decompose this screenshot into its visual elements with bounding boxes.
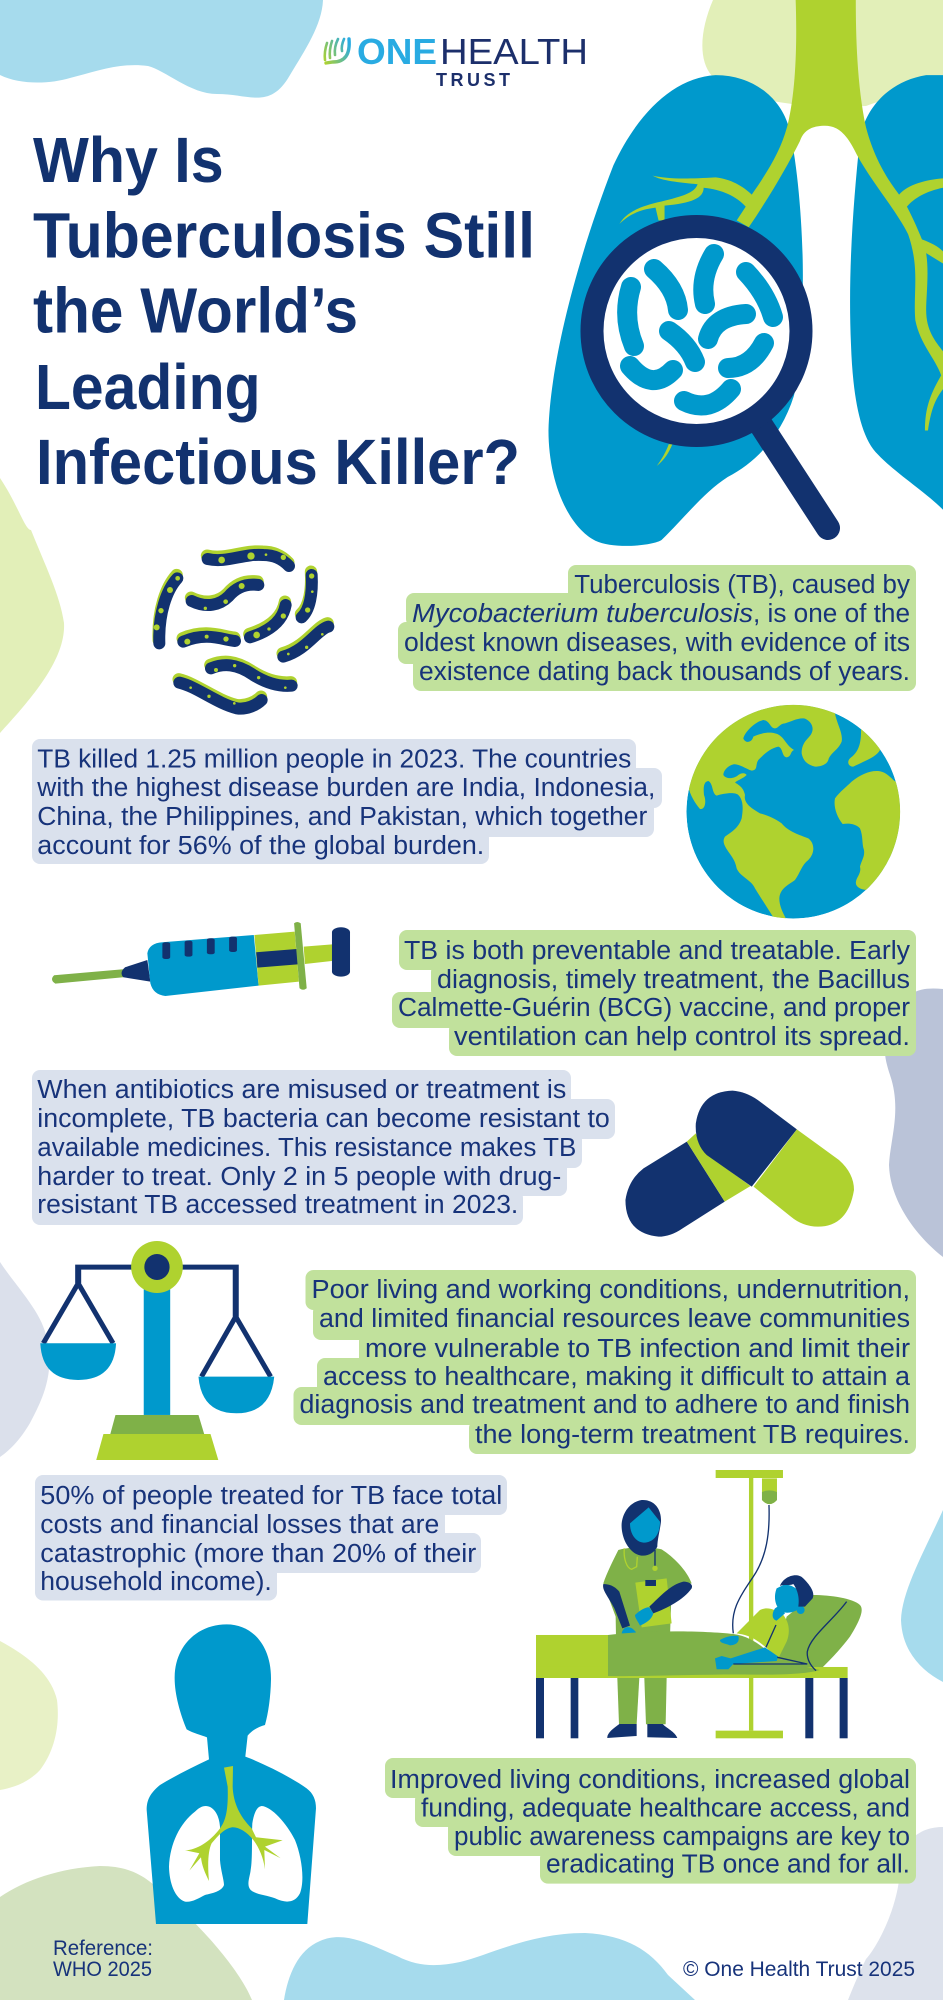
text block bbox=[390, 1766, 910, 1878]
magnifying glass handle bbox=[761, 425, 828, 528]
text block: funding, adequate healthcare access, and bbox=[421, 1794, 910, 1822]
text block: Improved living conditions, increased global bbox=[390, 1766, 910, 1794]
reference note: Reference: bbox=[53, 1937, 153, 1960]
copyright: © One Health Trust 2025 bbox=[683, 1958, 915, 1981]
logo bbox=[325, 31, 588, 90]
panel: drug resistance bbox=[32, 1070, 615, 1225]
text block: Mycobacterium tuberculosis bbox=[412, 600, 753, 628]
nurse bbox=[603, 1500, 692, 1738]
highlight background bbox=[32, 1070, 615, 1225]
background blob: left pale slate bbox=[0, 1262, 49, 1457]
text block: and limited financial resources leave communities bbox=[319, 1305, 910, 1333]
lungs bbox=[169, 1806, 302, 1902]
text block bbox=[398, 937, 911, 1051]
IV stand bbox=[716, 1470, 783, 1738]
title: Why Is bbox=[33, 124, 224, 196]
highlight background bbox=[398, 565, 916, 691]
bronchi bbox=[619, 0, 943, 466]
icon: syringe bbox=[52, 922, 350, 996]
text block: TB is both preventable and treatable. Early bbox=[404, 937, 910, 965]
text block: 50% of people treated for TB face total bbox=[40, 1482, 502, 1510]
highlight background bbox=[35, 1475, 507, 1600]
background blob: bottom left sage bbox=[0, 1866, 252, 2000]
panel: financial burden bbox=[35, 1475, 507, 1600]
text block: eradicating TB once and for all. bbox=[546, 1850, 910, 1878]
text block: with the highest disease burden are India, Indonesia, bbox=[36, 774, 655, 802]
text block: harder to treat. Only 2 in 5 people with drug- bbox=[37, 1163, 561, 1191]
title: Infectious Killer? bbox=[36, 426, 520, 498]
highlight background bbox=[32, 739, 662, 864]
bed bbox=[536, 1595, 862, 1738]
text block bbox=[40, 1482, 502, 1596]
text block: access to healthcare, making it difficult to attain a bbox=[323, 1363, 911, 1391]
text block: household income). bbox=[40, 1568, 272, 1596]
highlight background bbox=[385, 1758, 916, 1884]
background blob: bottom blue bbox=[284, 1933, 695, 2000]
rod spots bbox=[154, 552, 324, 705]
logo icon: leaf bbox=[325, 39, 349, 63]
title bbox=[33, 124, 535, 498]
text block bbox=[36, 746, 655, 860]
title: Leading bbox=[35, 351, 260, 423]
background blob: right lower pale slate bbox=[848, 1827, 943, 2000]
text block: more vulnerable to TB infection and limit their bbox=[365, 1335, 911, 1363]
text block: When antibiotics are misused or treatment is bbox=[37, 1076, 566, 1104]
title: the World’s bbox=[33, 274, 358, 346]
icon: bacteria cluster bbox=[154, 551, 328, 709]
text block: resistant TB accessed treatment in 2023. bbox=[37, 1191, 518, 1219]
text block bbox=[37, 1076, 610, 1219]
title: Tuberculosis Still bbox=[33, 200, 535, 272]
reference note: WHO 2025 bbox=[53, 1958, 152, 1981]
background blob: top right lime bbox=[702, 0, 943, 106]
background blob: top left blue bbox=[0, 0, 323, 98]
text block: the long-term treatment TB requires. bbox=[475, 1421, 910, 1449]
text block bbox=[300, 1276, 911, 1449]
rods lime edge bbox=[159, 551, 328, 705]
lungs bbox=[548, 0, 943, 546]
text block bbox=[404, 571, 910, 686]
text block: China, the Philippines, and Pakistan, which together bbox=[37, 803, 648, 831]
bed foot and blanket bbox=[536, 1627, 848, 1678]
background blob: right slate bbox=[885, 989, 943, 1257]
bronchi bbox=[185, 1766, 283, 1881]
icon: pills bbox=[625, 1091, 854, 1237]
text block: account for 56% of the global burden. bbox=[37, 832, 484, 860]
panel: social determinants bbox=[294, 1270, 916, 1454]
logo: TRUST bbox=[436, 70, 510, 90]
text block: diagnosis and treatment and to adhere to and finish bbox=[300, 1391, 910, 1419]
icon: balance scale bbox=[40, 1241, 274, 1460]
text block: ventilation can help control its spread. bbox=[454, 1023, 910, 1051]
background blob: left lower lime bbox=[0, 1641, 58, 1790]
patient bbox=[715, 1575, 847, 1671]
panel: prevention bbox=[392, 930, 916, 1056]
logo: HEALTH bbox=[440, 31, 588, 72]
text block: public awareness campaigns are key to bbox=[454, 1823, 910, 1851]
text block: diagnosis, timely treatment, the Bacillus bbox=[437, 966, 910, 994]
icon: nurse and patient in bed bbox=[536, 1470, 862, 1738]
rods navy bbox=[159, 555, 328, 709]
text block: catastrophic (more than 20% of their bbox=[40, 1540, 477, 1568]
text block: available medicines. This resistance makes TB bbox=[37, 1134, 576, 1162]
bacteria in lens bbox=[627, 254, 773, 405]
text block: Tuberculosis (TB), caused by bbox=[574, 571, 910, 599]
text block: TB killed 1.25 million people in 2023. The countries bbox=[37, 746, 631, 774]
text block: oldest known diseases, with evidence of its bbox=[404, 629, 910, 657]
icon: lungs with magnifying glass bbox=[548, 0, 943, 546]
panel: solutions bbox=[385, 1758, 916, 1884]
text block: , is one of the bbox=[753, 600, 910, 628]
background blob: left lime bbox=[0, 478, 64, 733]
highlight background bbox=[294, 1270, 916, 1454]
icon: earth globe bbox=[680, 700, 907, 920]
background blob: right blue bbox=[901, 1510, 943, 1682]
text block: incomplete, TB bacteria can become resistant to bbox=[37, 1105, 610, 1133]
text block: Poor living and working conditions, undernutrition, bbox=[312, 1276, 910, 1304]
icon: person with lungs bbox=[147, 1624, 316, 1924]
highlight background bbox=[392, 930, 916, 1056]
text block: costs and financial losses that are bbox=[40, 1511, 439, 1539]
panel: global burden bbox=[32, 739, 662, 864]
text block: existence dating back thousands of years. bbox=[419, 658, 910, 686]
text block: Calmette-Guérin (BCG) vaccine, and proper bbox=[398, 994, 911, 1022]
reference note bbox=[53, 1937, 153, 1981]
magnifying glass ring bbox=[592, 226, 801, 436]
panel: TB origin bbox=[398, 565, 916, 691]
logo wordmark: ONE bbox=[357, 31, 437, 72]
